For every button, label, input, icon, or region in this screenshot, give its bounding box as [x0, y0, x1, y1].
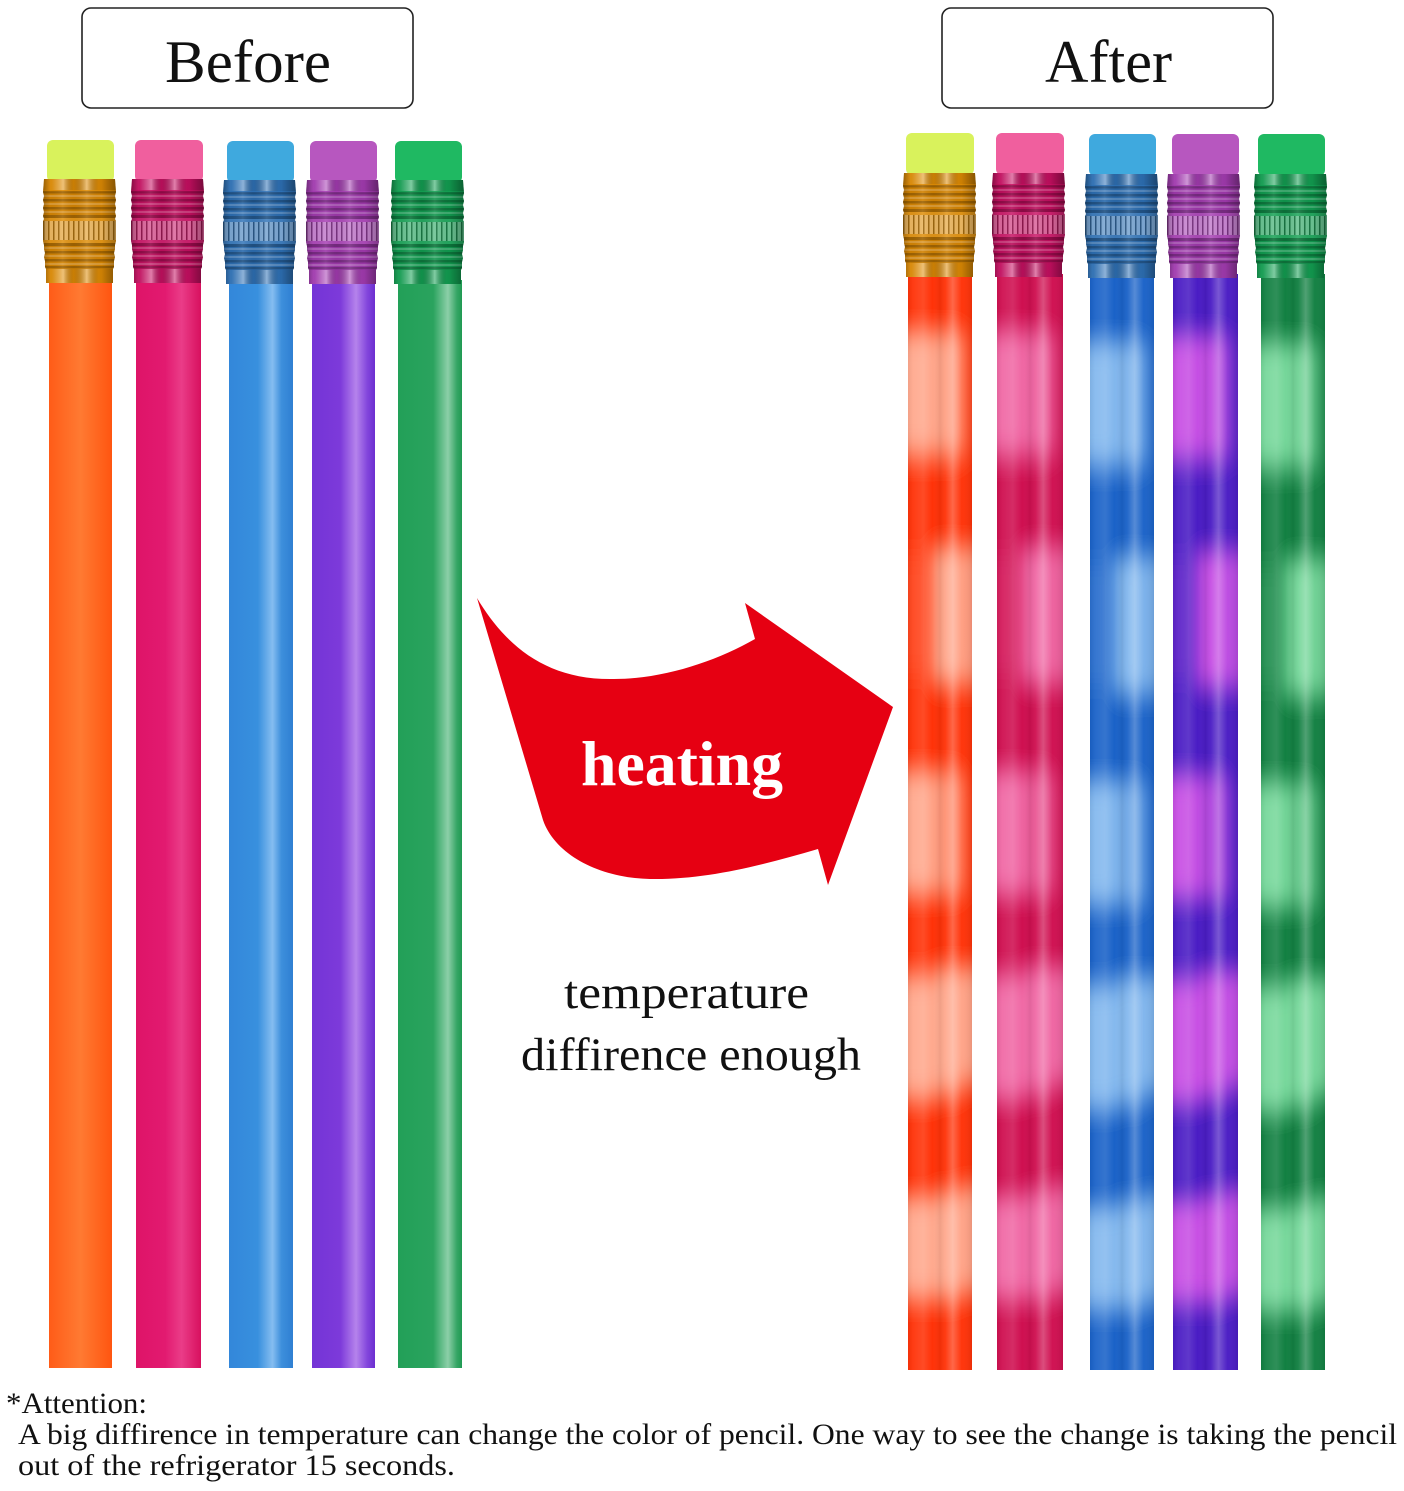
- arrow: heating: [477, 598, 893, 885]
- text: attention note: [6, 1387, 1397, 1482]
- text: temperature difference note: diffirence enough: [521, 1029, 861, 1081]
- panel: pencils before heating: [43, 140, 464, 1368]
- pencil: orange after: [903, 133, 976, 1370]
- text: attention note: A big diffirence in temperature can change the color of pencil. One way to see the change is taking the pencil: [18, 1418, 1397, 1451]
- pencil: green before: [391, 141, 464, 1368]
- pencil: orange before: [43, 140, 116, 1368]
- panel: pencils after heating: [903, 133, 1327, 1370]
- arrow: heating: heating: [581, 728, 783, 799]
- label box: Before: Before: [165, 29, 331, 95]
- text: attention note: out of the refrigerator 15 seconds.: [18, 1449, 455, 1482]
- pencil: purple after: [1167, 134, 1240, 1370]
- pencil: pink after: [992, 133, 1065, 1370]
- pencil: green after: [1254, 134, 1327, 1370]
- pencil: blue after: [1085, 134, 1158, 1370]
- label box: After: After: [1045, 29, 1172, 95]
- pencil: pink before: [131, 140, 204, 1368]
- label box: After: [942, 8, 1273, 108]
- pencil: purple before: [306, 141, 379, 1368]
- label box: Before: [82, 8, 413, 108]
- text: temperature difference note: [521, 967, 861, 1081]
- text: attention note: *Attention:: [6, 1387, 147, 1420]
- pencil: blue before: [223, 141, 296, 1368]
- text: temperature difference note: temperature: [564, 967, 809, 1019]
